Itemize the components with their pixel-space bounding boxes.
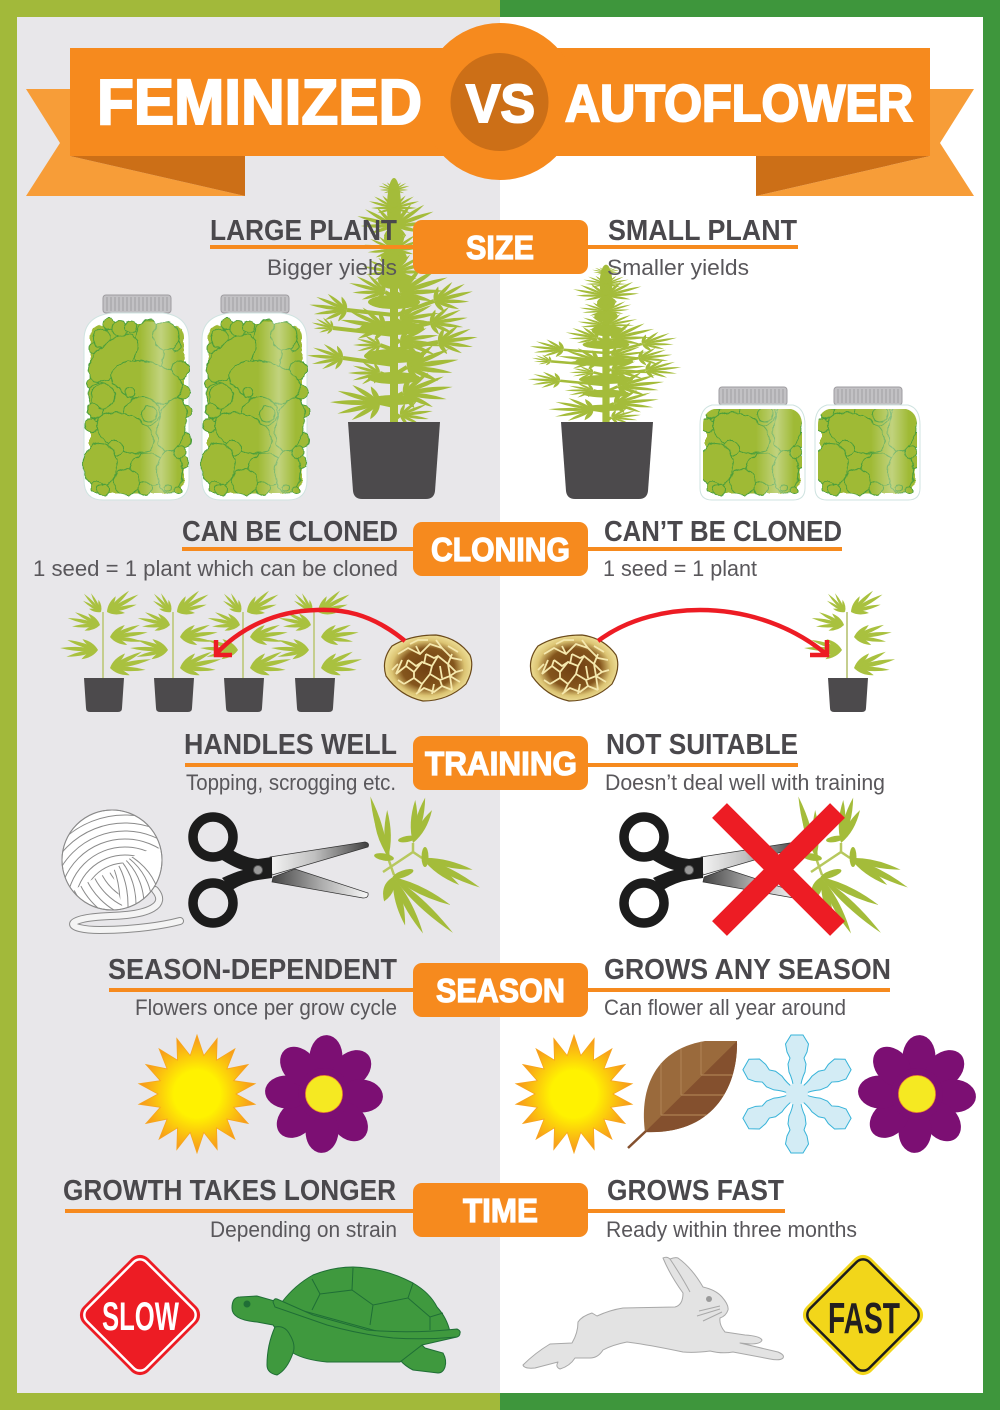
icon: branch right <box>795 796 909 936</box>
large jar 2 <box>198 295 310 500</box>
sign: fast <box>798 1250 928 1380</box>
heading: grows any season: GROWS ANY SEASON <box>604 954 891 986</box>
sign text: fast: FAST <box>828 1294 900 1343</box>
label: time: TIME <box>463 1192 538 1229</box>
seed right <box>530 635 618 701</box>
subtext: bigger yields: Bigger yields <box>267 255 397 280</box>
heading: can't be cloned: CAN’T BE CLONED <box>604 516 842 548</box>
small jar 2 <box>814 386 920 500</box>
title banner <box>26 23 974 196</box>
icon: flower right <box>855 1032 979 1156</box>
section: cloning <box>33 516 842 581</box>
icon: scissors left <box>193 817 369 923</box>
heading: not suitable: NOT SUITABLE <box>606 729 798 761</box>
icon: red cross <box>720 810 838 928</box>
arrow: seed to clones <box>216 610 405 655</box>
subtext: topping: Topping, scrogging etc. <box>186 770 396 795</box>
icon: rabbit <box>523 1257 783 1369</box>
label: training: TRAINING <box>425 745 577 782</box>
single plant in pot <box>803 585 898 712</box>
section: time <box>63 1175 857 1242</box>
heading: season-dependent: SEASON-DEPENDENT <box>108 954 397 986</box>
icon: autumn leaf <box>628 1040 740 1148</box>
icon: snowflake <box>740 1035 854 1153</box>
label: season: SEASON <box>436 972 565 1009</box>
icon: cut branch left <box>367 796 481 936</box>
small plant illustration <box>527 265 683 499</box>
subtext: can flower: Can flower all year around <box>604 995 846 1020</box>
subtext: flowers once: Flowers once per grow cycle <box>135 995 397 1020</box>
sign: slow <box>75 1250 205 1380</box>
heading: growth takes longer: GROWTH TAKES LONGER <box>63 1175 396 1207</box>
section: size <box>210 215 798 280</box>
large plant illustration <box>306 178 480 499</box>
section: training <box>184 729 885 795</box>
section: season <box>108 954 891 1020</box>
heading: can be cloned: CAN BE CLONED <box>182 516 398 548</box>
heading: grows fast: GROWS FAST <box>607 1175 784 1207</box>
sign text: slow: SLOW <box>102 1295 179 1339</box>
arrow: seed to one plant <box>598 610 827 655</box>
label: cloning: CLONING <box>431 531 570 568</box>
heading: large plant: LARGE PLANT <box>210 215 397 247</box>
heading: handles well: HANDLES WELL <box>184 729 397 761</box>
subtext: ready within three months: Ready within three months <box>606 1217 857 1242</box>
subtext: can't be cloned detail: 1 seed = 1 plant <box>603 556 757 581</box>
seed left <box>384 635 472 701</box>
title: autoflower: AUTOFLOWER <box>565 75 913 133</box>
four clones in pots <box>59 585 365 712</box>
icon: sun left <box>139 1035 255 1153</box>
title: vs: VS <box>466 74 535 134</box>
icon: ball of yarn <box>62 810 184 934</box>
subtext: doesn't deal well: Doesn’t deal well with training <box>605 770 885 795</box>
icon: sun right <box>516 1035 632 1153</box>
title: feminized: FEMINIZED <box>97 66 422 138</box>
heading: small plant: SMALL PLANT <box>608 215 797 247</box>
icon: flower left <box>262 1032 386 1156</box>
label: size: SIZE <box>466 229 534 266</box>
icon: turtle <box>232 1267 460 1375</box>
small jar 1 <box>700 386 806 500</box>
subtext: depending on strain: Depending on strain <box>210 1217 397 1242</box>
icon: scissors right <box>624 817 800 923</box>
subtext: can be cloned detail: 1 seed = 1 plant which can be cloned <box>33 556 398 581</box>
large jar 1 <box>80 295 192 500</box>
subtext: smaller yields: Smaller yields <box>607 255 749 280</box>
